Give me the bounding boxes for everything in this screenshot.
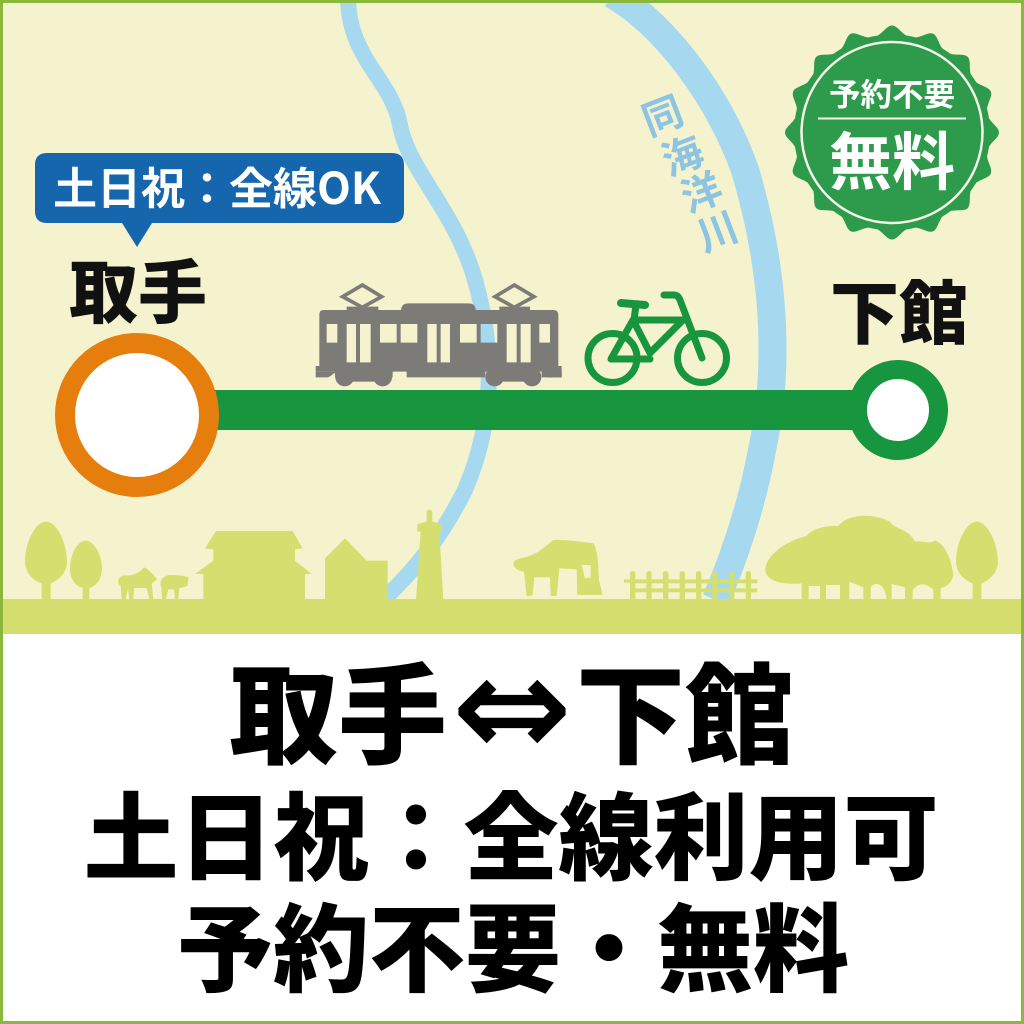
left silhouettes: trees, sheep, buildings — [25, 509, 443, 600]
river label: 同 — [636, 89, 690, 145]
train icon — [316, 285, 562, 386]
river label: 川 — [691, 205, 745, 261]
route line — [205, 390, 865, 430]
badge: 予約不要 無料 — [785, 26, 999, 240]
bogies — [335, 368, 541, 386]
badge: 予約不要 無料: 予約不要 — [829, 76, 955, 112]
pantographs — [343, 285, 534, 307]
right river — [612, 0, 773, 600]
headline line 2: 土日祝：全線利用可 — [83, 763, 939, 900]
skyline silhouette — [0, 509, 1024, 634]
callout: 全線OK: 土日祝：全線OK — [53, 153, 382, 217]
station label: 取手: 取手 — [69, 237, 207, 337]
headline line 1: ⇔ — [453, 625, 571, 790]
tree — [956, 522, 998, 600]
headline line 1: 取手 — [229, 630, 447, 787]
right silhouettes: cow, fence, trees — [513, 516, 998, 600]
sheep — [118, 567, 189, 599]
headline — [83, 625, 939, 1012]
bicycle icon — [588, 295, 726, 382]
ground — [0, 599, 1024, 634]
station marker: 取手 — [65, 343, 209, 487]
headline line 1 — [229, 625, 794, 790]
skirts — [316, 372, 562, 377]
river label: 洋 — [675, 166, 729, 222]
lighthouse — [416, 509, 443, 600]
left river — [348, 0, 489, 598]
station label: 下館: 下館 — [830, 258, 968, 358]
tree cluster — [765, 516, 953, 599]
cow — [513, 540, 603, 597]
station marker: 下館 — [858, 370, 938, 450]
badge: 予約不要 無料: 無料 — [829, 128, 955, 198]
map background — [0, 0, 1024, 634]
temple — [195, 531, 312, 600]
callout: 全線OK — [35, 153, 404, 247]
headline line 3: 予約不要・無料 — [177, 873, 849, 1012]
trees — [25, 522, 102, 600]
house — [325, 538, 388, 600]
fence — [624, 571, 757, 599]
river label: 海 — [656, 129, 710, 185]
river label — [636, 89, 745, 261]
train body — [316, 303, 562, 377]
headline line 1: 下館 — [576, 630, 794, 787]
